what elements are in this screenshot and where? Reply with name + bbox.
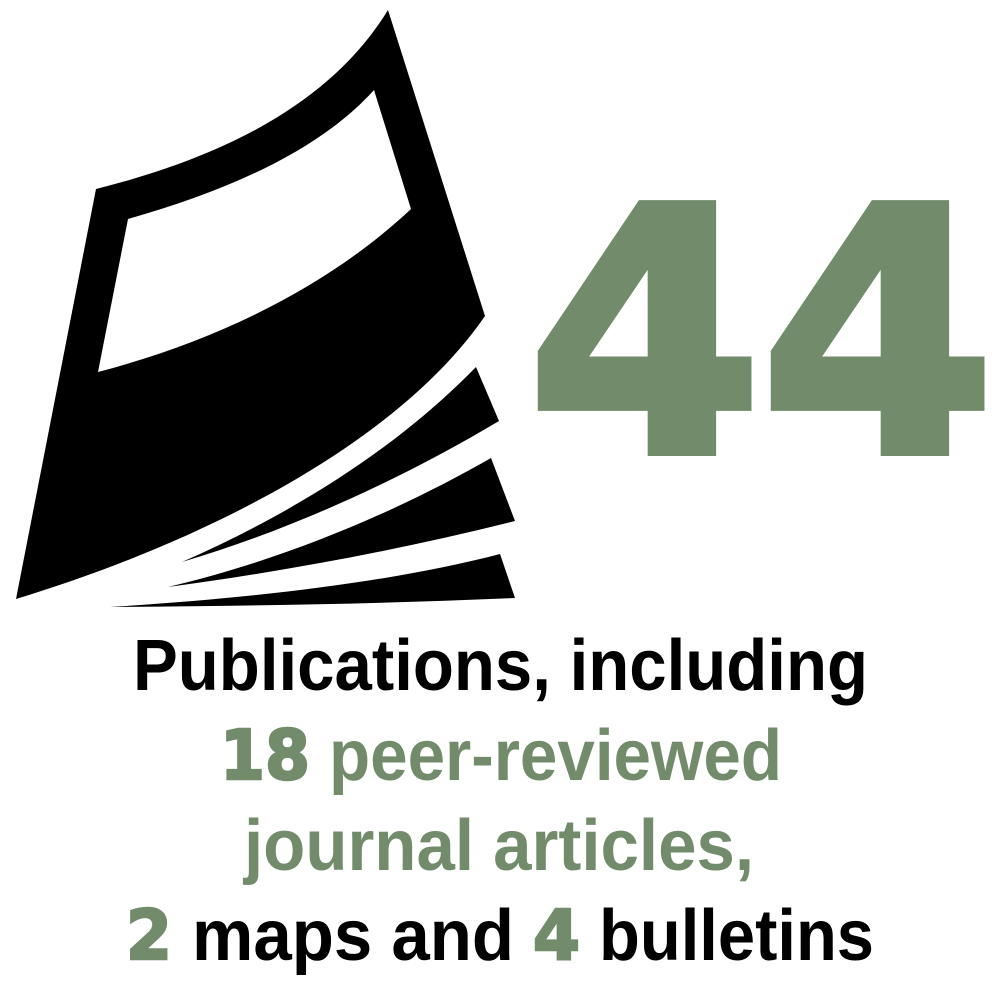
text: maps and bulletins: bulletins <box>599 896 874 976</box>
icon: open book with fanned pages <box>16 10 515 607</box>
big number 44: 4 <box>526 137 763 533</box>
text: 18 peer-reviewed: 18 <box>220 716 310 796</box>
text: 18 peer-reviewed: peer-reviewed <box>329 716 782 796</box>
text: maps and bulletins: maps and <box>192 896 514 976</box>
text: maps and bulletins: 2 <box>126 896 172 976</box>
text: maps and bulletins <box>126 896 874 976</box>
big number 44 <box>526 137 996 533</box>
big number 44: 4 <box>760 137 996 533</box>
text: maps and bulletins: 4 <box>533 896 580 976</box>
text: journal articles: journal articles, <box>242 806 754 886</box>
text: publications: Publications, including <box>133 626 868 706</box>
